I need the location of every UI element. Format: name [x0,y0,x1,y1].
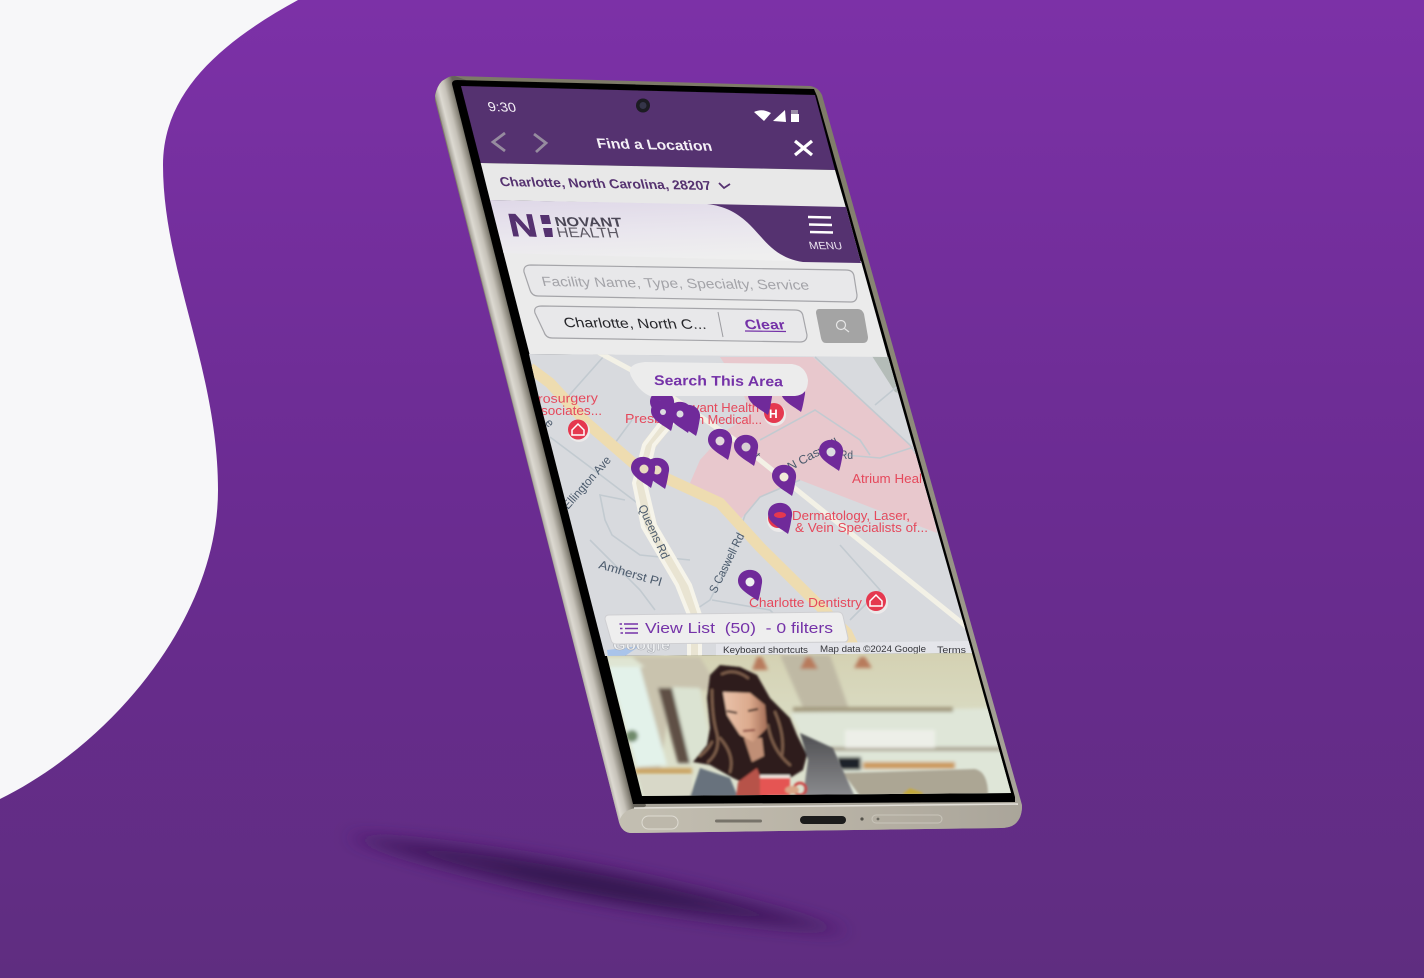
close icon [795,141,812,155]
facility search field: Facility Name, Type, Specialty, Service [540,274,811,293]
lifestyle photo of woman with red mug [600,650,1020,800]
dark street labels: S Caswell Rd [706,531,747,595]
dark street labels: Amherst Pl [597,557,663,589]
Novant Health logo: NOVANT [553,214,624,230]
dark street labels: Rd [840,448,853,462]
hamburger menu: MENU [808,240,844,252]
Queens Road [634,408,700,656]
red place labels: vant Health [693,401,759,415]
location search field: Clear [743,317,788,332]
dark street labels: N Caswell [785,435,841,474]
sofa [843,769,988,796]
app header bar [461,86,835,170]
dark street labels: Queens Rd [635,502,672,561]
site header with logo and menu [490,200,888,358]
map attribution footer [607,641,972,656]
location search field: Charlotte, North C... [562,315,708,332]
red place labels [538,391,928,610]
red place labels: Dermatology, Laser, [792,509,910,523]
minor streets [550,356,916,620]
dark street labels: e [542,416,557,430]
dark street labels: Ellington Ave [560,453,614,512]
white organic blob [0,0,298,799]
map attribution footer: Terms [937,645,966,656]
red mug [760,776,790,796]
search this area button [630,362,808,396]
white main road [598,352,967,627]
phone bottom edge with ports [619,803,1022,833]
woman face [723,692,767,742]
status time: 9:30 [486,99,518,115]
hamburger menu [808,217,844,252]
location search field [535,306,807,342]
map attribution footer: Google [613,637,670,654]
red place labels: n Medical... [697,413,762,427]
Novant Health logo [505,207,624,243]
corner park [872,356,898,393]
view list button: View List (50) - 0 filters [645,620,833,637]
header title: Find a Location [595,136,714,155]
phone floor shadow [345,836,850,932]
black screen bezel [452,80,1015,804]
red place labels: Atrium Heal [852,472,922,486]
red place labels: rosurgery [538,391,599,406]
woman neck [744,738,764,762]
hospital campus area [690,357,937,533]
back and forward arrows [493,133,546,152]
Novant Health logo: HEALTH [555,225,621,242]
purple swoosh [707,204,861,263]
red place labels: sociates... [541,404,602,418]
search form [524,265,868,343]
phone body frame [435,76,1022,833]
location pins [631,381,843,601]
hair highlights [700,672,790,772]
map attribution footer: Keyboard shortcuts [723,645,808,656]
search this area button: Search This Area [654,372,783,389]
location selector bar [481,163,846,208]
status icons [754,110,799,122]
red place labels: & Vein Specialists of... [795,521,928,535]
red place markers [568,403,888,614]
red place markers: H [769,407,778,421]
red top [736,768,768,797]
Novant Health logo: N [505,207,541,243]
phone mockup [435,76,1022,833]
view list button [605,612,848,644]
dark street labels: t [751,450,764,462]
red place labels: Charlotte Dentistry [749,596,863,610]
map [529,354,972,656]
woman hair [693,665,807,792]
map attribution footer: Map data ©2024 Google [820,644,926,655]
search button [816,309,868,343]
blanket [690,768,738,797]
tan highway [530,368,860,660]
location selector bar: Charlotte, North Carolina, 28207 [498,174,713,193]
facility search field [524,265,857,302]
red place labels: Presby [625,412,670,426]
front camera [636,98,650,112]
room background [636,657,710,769]
dark street labels [542,416,853,595]
